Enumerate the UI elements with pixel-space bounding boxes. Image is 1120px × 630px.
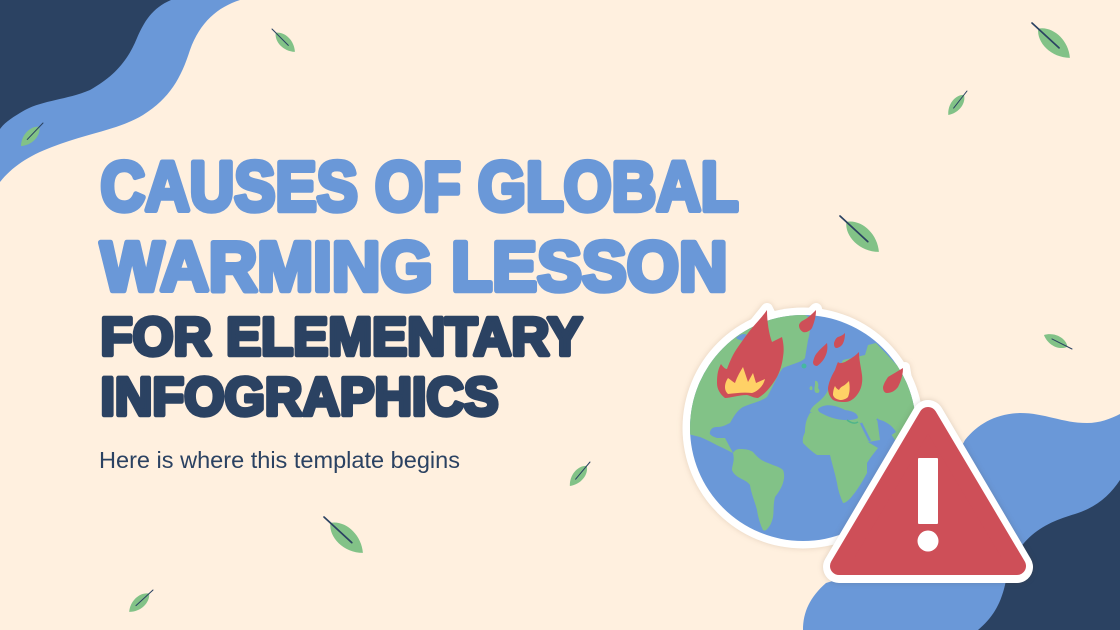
large flame core: [725, 367, 765, 394]
subtitle heading: line 3: FOR ELEMENTARY: [100, 307, 582, 367]
South America: [732, 449, 784, 531]
Eurasia: [810, 343, 914, 442]
subtitle heading: line 4: INFOGRAPHICS: [100, 367, 498, 427]
leaf: on top-left wave: [17, 119, 47, 150]
exclamation bar: [918, 458, 938, 524]
leaf: top centre: [268, 25, 299, 56]
leaf: below subtitle: [566, 458, 594, 490]
North America: [690, 315, 810, 453]
Africa: [803, 410, 878, 503]
leaf: centre right: [834, 209, 885, 259]
large flame: [717, 310, 784, 398]
leaf: bottom left: [125, 586, 157, 616]
medium flame core: [833, 381, 850, 400]
continents: [690, 315, 914, 531]
top-left blue wave: [0, 0, 240, 182]
ocean: [690, 315, 916, 541]
small flame 1: [799, 310, 816, 332]
medium flame: [828, 352, 862, 402]
Red Sea: [861, 423, 870, 441]
warning sign: [839, 416, 1017, 567]
Arabian Sea: [876, 419, 896, 436]
leaf: far right: [1041, 330, 1074, 354]
Hudson Bay notch: [736, 334, 747, 340]
small flame 3: [834, 333, 845, 348]
triangle outline: [839, 416, 1017, 567]
triangle fill: [839, 416, 1017, 566]
leaf: bottom centre: [318, 510, 369, 560]
title: line 1: CAUSES OF GLOBAL: [100, 148, 738, 226]
Mediterranean Sea: [818, 405, 858, 420]
bottom-right blue wave: [803, 413, 1120, 630]
small flame 2: [813, 343, 827, 366]
bottom-right navy wave: [978, 480, 1120, 630]
leaf: upper right small: [944, 88, 971, 118]
Nile river: [847, 420, 858, 423]
exclamation dot: [918, 530, 938, 552]
small flame 4: [883, 368, 903, 393]
top-left navy wave: [0, 0, 171, 129]
leaf: top right: [1026, 16, 1076, 64]
British Isles: [810, 381, 819, 393]
globe outline: [682, 308, 924, 548]
illustration: burning globe: [680, 308, 930, 548]
Atlantic dot: [802, 364, 806, 368]
tagline: Here is where this template begins: [99, 447, 460, 473]
title: line 2: WARMING LESSON: [100, 228, 728, 306]
